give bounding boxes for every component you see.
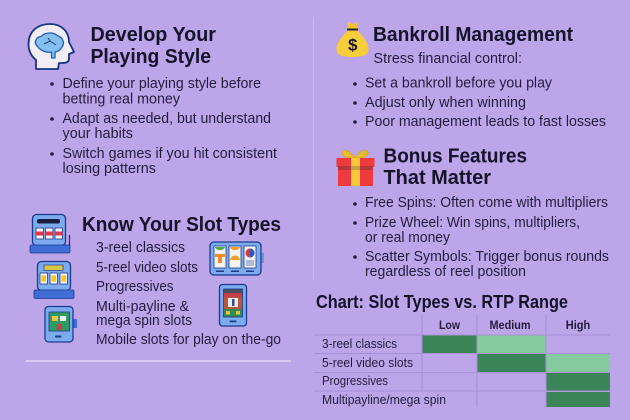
heading: develop your playing style	[90, 23, 216, 68]
text block: bankroll bullets: Adjust only when winning	[365, 95, 526, 111]
panel: bonus features	[336, 144, 609, 280]
table row labels: Progressives	[322, 374, 388, 388]
text block: bankroll bullets: Set a bankroll before you play	[365, 76, 553, 92]
table row labels	[322, 337, 446, 407]
heading: bankroll management: Bankroll Management	[373, 23, 573, 46]
panel: chart of slot types vs RTP range	[314, 292, 610, 407]
text block: slot type list	[96, 240, 281, 348]
text block: playing style bullets: betting real money	[62, 92, 181, 108]
text block: playing style bullets: Adapt as needed, but understand	[62, 111, 271, 127]
text block: slot type list: 3-reel classics	[96, 240, 185, 256]
icon: gift box	[336, 150, 374, 186]
icon: multi-payline tablet	[45, 306, 77, 342]
table column headers: Medium	[490, 320, 530, 332]
text block: slot type list: 5-reel video slots	[96, 260, 198, 276]
table column headers	[439, 320, 590, 332]
text block: bonus bullets: or real money	[365, 230, 451, 246]
text block: bonus bullets	[353, 195, 609, 280]
table column headers: High	[566, 320, 590, 332]
text block: slot type list: mega spin slots	[96, 313, 192, 329]
text block: slot type list: Mobile slots for play on the-go	[96, 332, 281, 348]
text block: playing style bullets: losing patterns	[62, 161, 156, 177]
text block: bonus bullets: Prize Wheel: Win spins, multipliers,	[365, 215, 580, 231]
heading: know your slot types: Know Your Slot Types	[82, 213, 281, 236]
icon: 5-reel video slot machine	[34, 262, 74, 298]
panel: bankroll management	[336, 22, 606, 130]
icon: money bag	[336, 22, 368, 57]
table row labels: 3-reel classics	[322, 337, 397, 351]
table row labels: 5-reel video slots	[322, 356, 413, 370]
text block: bankroll bullets	[353, 76, 606, 130]
heading: develop your playing style: Playing Style	[90, 45, 211, 68]
panel: know your slot types	[30, 213, 281, 348]
text block: bonus bullets: regardless of reel position	[365, 264, 526, 280]
icon: money bag: $	[348, 36, 358, 54]
text block: playing style bullets: Switch games if you hit consistent	[62, 146, 277, 162]
text: stress financial control: Stress financial control:	[374, 51, 522, 67]
table row labels: Multipayline/mega spin	[322, 393, 446, 407]
heading: develop your playing style: Develop Your	[90, 23, 216, 46]
text block: playing style bullets	[50, 76, 277, 177]
text block: bonus bullets: Free Spins: Often come with multipliers	[365, 195, 608, 211]
icon: 3-reel slot machine	[30, 214, 70, 253]
text block: playing style bullets: your habits	[62, 126, 133, 142]
text block: slot type list: Multi-payline &	[96, 299, 189, 315]
icon: video slot screen	[210, 242, 264, 275]
heading: bonus features that matter: That Matter	[384, 166, 491, 189]
text block: bonus bullets: Scatter Symbols: Trigger bonus rounds	[365, 249, 609, 265]
panel: develop your playing style	[28, 23, 277, 177]
table column headers: Low	[439, 320, 460, 332]
text block: slot type list: Progressives	[96, 279, 174, 295]
table cells: RTP heatmap	[422, 336, 610, 407]
heading: bonus features that matter	[384, 144, 527, 189]
icon: head with brain	[28, 24, 74, 69]
heading: bonus features that matter: Bonus Features	[384, 144, 527, 168]
heading: chart title: Chart: Slot Types vs. RTP Range	[316, 292, 568, 312]
text block: bankroll bullets: Poor management leads to fast losses	[365, 114, 606, 130]
icon: mobile phone slot	[220, 284, 246, 326]
text block: playing style bullets: Define your playing style before	[62, 76, 261, 92]
